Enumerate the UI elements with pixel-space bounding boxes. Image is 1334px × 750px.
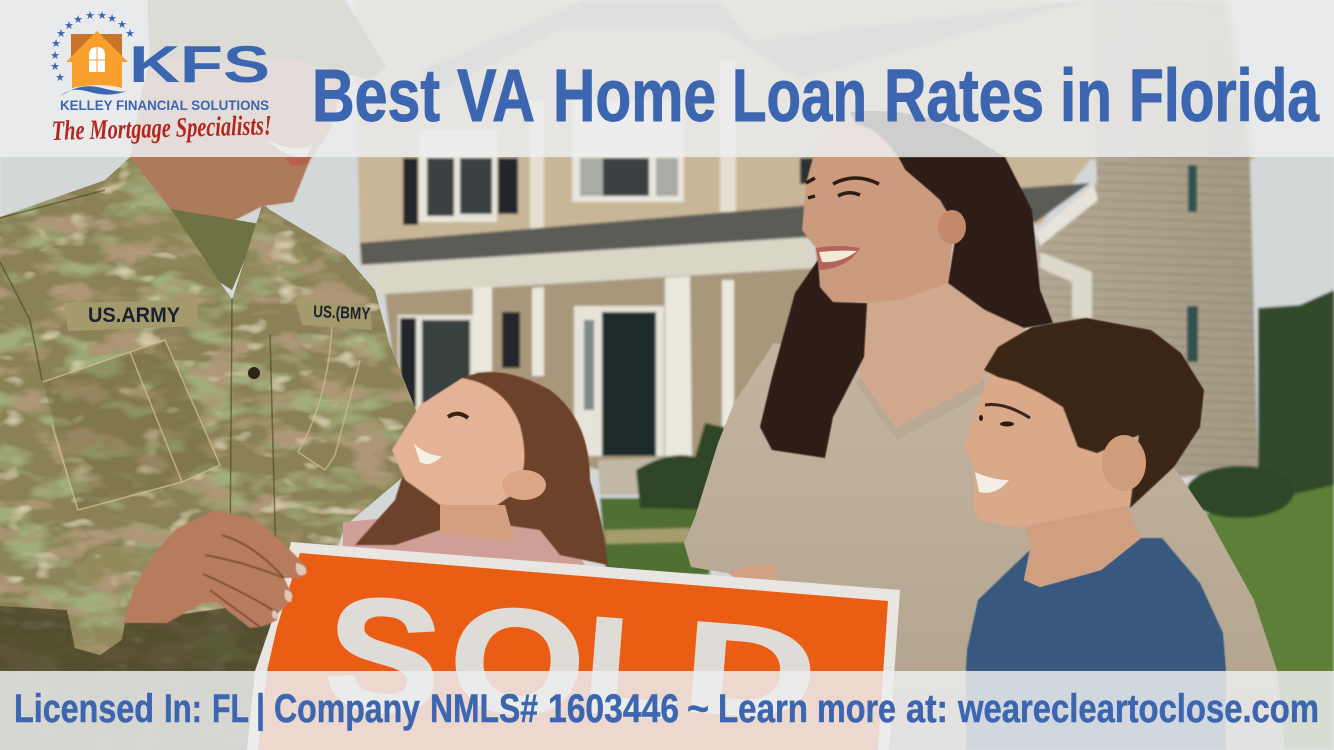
sign lettering: O	[443, 574, 591, 749]
soldier sleeve cuff	[67, 545, 155, 655]
logo star arc: ★	[50, 61, 60, 73]
girl shirt	[343, 515, 585, 565]
soldier neck and face	[130, 58, 345, 225]
footer licensing line: at:	[906, 687, 948, 731]
soldier right pocket flap	[298, 326, 360, 470]
boy brow	[985, 405, 1030, 418]
woman chest and neck	[860, 270, 1024, 428]
soldier lower dark shadow	[0, 606, 300, 750]
right lawn	[1190, 485, 1334, 750]
small dark upper window	[800, 158, 818, 184]
shrubs by porch	[636, 423, 728, 510]
sign lettering: D	[678, 594, 822, 748]
soldier	[0, 0, 418, 750]
house upper storey	[355, 0, 1255, 265]
logo star arc: ★	[85, 10, 95, 22]
woman ear	[938, 210, 966, 244]
porch fascia	[362, 237, 815, 296]
soldier shoulder seam	[0, 190, 276, 560]
logo star arc: ★	[107, 13, 117, 25]
logo letters: KFS	[129, 36, 270, 94]
boy eyes	[979, 415, 1014, 426]
sign lettering: L	[578, 588, 687, 749]
wing porch trim	[1040, 252, 1092, 318]
girl ear	[502, 470, 546, 500]
page title	[312, 54, 1320, 137]
footer licensing line	[14, 687, 1319, 731]
sign lettering	[319, 561, 822, 749]
soldier hat	[147, 0, 386, 80]
upper window left	[403, 130, 518, 225]
sign lettering: S	[319, 561, 448, 749]
soldier undershirt	[165, 208, 260, 290]
boy smile	[975, 472, 1009, 493]
girl smile	[414, 444, 442, 464]
logo house icon	[66, 31, 128, 88]
girl eye	[448, 414, 468, 418]
footer licensing line: In:	[164, 687, 202, 731]
name tape right	[295, 299, 372, 330]
hand nails	[272, 563, 306, 619]
girl face	[392, 378, 524, 510]
name tape left	[64, 300, 198, 331]
woman back hair	[898, 157, 1053, 328]
woman hair top in band	[850, 111, 1005, 157]
KFS logo	[50, 10, 272, 147]
logo tagline: The Mortgage Specialists!	[51, 110, 272, 147]
logo wave	[61, 86, 130, 96]
wing windows	[1187, 165, 1198, 362]
boy t-shirt	[966, 538, 1226, 750]
house side wing	[1036, 0, 1258, 560]
footer licensing line: ~	[687, 687, 709, 731]
page title: Rates	[884, 54, 1044, 137]
footer licensing line: Licensed	[14, 687, 154, 731]
soldier sleeve	[0, 500, 100, 610]
footer licensing line: Learn	[718, 687, 808, 731]
logo star arc: ★	[51, 38, 61, 50]
logo star arc	[50, 10, 135, 84]
footer licensing line: FL	[212, 687, 249, 731]
footer licensing line: NMLS#	[430, 687, 538, 731]
woman lips	[816, 246, 860, 270]
centre lawn	[600, 498, 710, 575]
porch window	[398, 312, 520, 420]
upper window centre	[572, 100, 684, 202]
soldier jacket	[0, 157, 418, 750]
woman left hair	[760, 260, 867, 458]
house gable roof	[420, 0, 1090, 90]
logo star arc: ★	[55, 72, 65, 84]
logo star arc: ★	[56, 28, 66, 40]
page title: Loan	[732, 54, 867, 137]
soldier right collar	[232, 205, 312, 300]
logo star arc: ★	[117, 19, 127, 31]
woman sweater	[684, 328, 1285, 750]
girl	[343, 372, 608, 565]
trim posts	[530, 60, 736, 230]
logo company name: KELLEY FINANCIAL SOLUTIONS	[60, 97, 269, 113]
page title: VA	[457, 54, 535, 137]
soldier left collar	[105, 157, 232, 298]
boy ear	[1102, 435, 1146, 491]
wing roof trim	[1036, 185, 1098, 246]
woman teeth	[819, 251, 857, 262]
sold sign	[247, 542, 900, 750]
footer licensing line: 1603446	[548, 687, 679, 731]
steps	[598, 458, 660, 495]
logo star arc: ★	[97, 10, 107, 22]
footer licensing line: more	[817, 687, 896, 731]
girl neck	[440, 505, 515, 542]
page title: Home	[553, 54, 716, 137]
porch interior	[385, 268, 815, 470]
soldier teeth	[268, 140, 312, 157]
woman face	[802, 122, 955, 302]
woman hand on sign	[728, 563, 776, 580]
right shrub	[1186, 466, 1294, 518]
woman eyes	[808, 193, 860, 198]
logo star arc: ★	[73, 14, 83, 26]
boy	[964, 318, 1226, 750]
boy face	[964, 375, 1138, 527]
page title: Best	[312, 54, 440, 137]
soldier chest pocket	[43, 340, 220, 510]
boy hair	[984, 318, 1204, 508]
name tape left: US.ARMY	[88, 304, 180, 327]
name tape right: US.(BMY	[313, 302, 371, 324]
porch columns	[473, 276, 734, 456]
woman v-neck collar	[856, 377, 986, 440]
porch roof	[360, 183, 1090, 265]
top banner band	[0, 0, 1334, 157]
bottom banner band	[0, 671, 1334, 750]
front door	[574, 306, 664, 456]
hand shape	[124, 510, 308, 628]
garden path	[604, 528, 690, 544]
soldier hand	[124, 510, 308, 628]
logo star arc: ★	[64, 20, 74, 32]
hand finger creases	[203, 535, 284, 627]
woman	[684, 111, 1285, 750]
girl hair	[355, 372, 608, 565]
trees at right	[1258, 290, 1334, 500]
footer licensing line: Company	[274, 687, 421, 731]
logo star arc: ★	[50, 50, 60, 62]
boy neck	[1024, 500, 1141, 587]
soldier rank pin	[248, 367, 260, 379]
logo star arc: ★	[125, 28, 135, 40]
soldier lower lip	[284, 157, 311, 166]
woman eyebrows	[806, 178, 879, 184]
sign orange panel	[258, 553, 888, 750]
page title: in	[1060, 54, 1112, 137]
footer licensing line: |	[256, 687, 265, 731]
sign border	[247, 542, 900, 750]
